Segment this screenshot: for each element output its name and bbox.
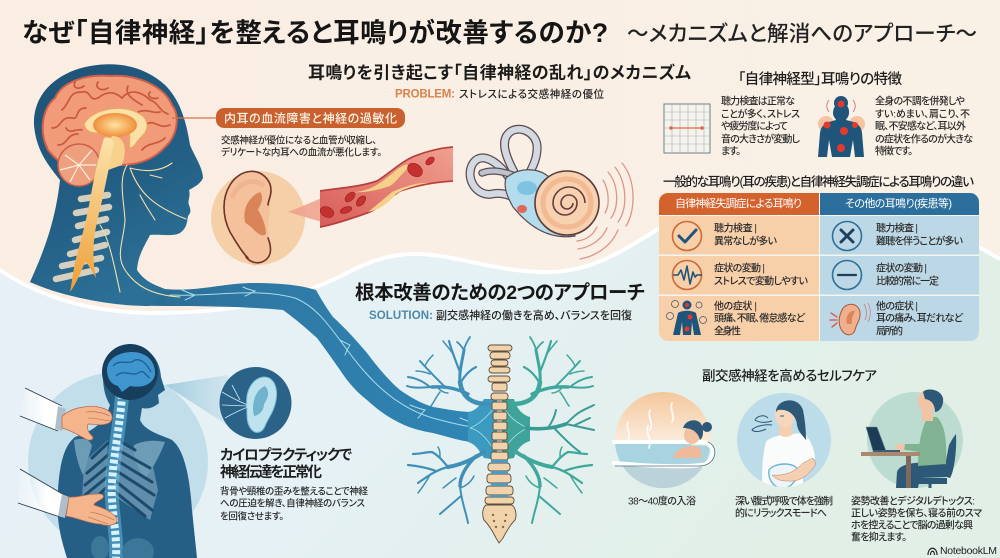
upper therapist hand [20,388,112,440]
nerve band flowing from head to spine [30,240,480,445]
icon: warm bath [600,392,715,488]
feature text: whole body: の症状を作るのが大きな [875,132,973,146]
title [22,18,977,48]
icon: body with symptoms small [666,300,706,335]
comparison heading: 一般的な耳鳴り(耳の疾患)と自律神経失調症による耳鳴りの違い [663,174,974,189]
posture caption: 奮を抑えます。 [851,530,907,544]
vertebrae of neck [56,195,109,279]
row 1 left text: 聴力検査 | [714,222,757,234]
nerve junction: blue side [468,399,497,460]
icon: check [672,222,702,250]
row 2 left text: ストレスで変動しやすい [714,274,808,288]
title: なぜ「自律神経」を整えると耳鳴りが改善するのか? [22,18,608,48]
nerves in head [100,163,186,297]
feature text: hearing [721,94,801,158]
row 3 right text: 局所的 [876,324,903,338]
callout description: デリケートな内耳への血流が悪化します。 [221,146,382,158]
table header: autonomic: 自律神経失調症による耳鳴り [675,196,802,210]
problem sub-label: ストレスによる交感神経の優位 [458,88,604,100]
head silhouette with brain and spine [30,64,203,306]
callout pill [216,108,405,128]
pointer from head to ear detail [165,375,232,428]
ribs [85,440,154,516]
feature text: hearing: や疲労度によって [721,120,788,132]
solution sub-label: 副交感神経の働きを高め、バランスを回復 [436,308,632,322]
pointer from ear to vessel [288,198,322,222]
title: 〜メカニズムと解消へのアプローチ〜 [627,22,977,46]
patient silhouette [57,347,197,558]
row 3 left text: 他の症状 | [714,300,757,312]
row 3 left text: 頭痛、不眠、倦怠感など [714,312,806,324]
chiropractic description [220,486,368,522]
lower therapist hand [18,469,117,525]
cerebellum [58,144,100,186]
icon: body with symptom points [818,96,865,157]
brainstem [107,136,125,170]
junction fibers [470,408,528,450]
callout pill: 内耳の血流障害と神経の過敏化 [224,110,397,126]
feature text: whole body: 眠、不安感など、耳以外 [875,120,966,132]
discs [490,460,508,497]
chiropractic description: を回復させます。 [220,510,284,522]
brain [43,76,177,167]
row 2 right text: 比較的常に一定 [876,274,939,288]
background: cool solution zone [0,197,1000,558]
row 2 left text [714,262,808,288]
spine illustration [483,345,516,543]
row 3 right text: 他の症状 | [876,300,918,312]
row 1 right text: 聴力検査 | [876,222,918,234]
breathing caption: 深い腹式呼吸で体を強制 [735,494,833,508]
feature text: whole body [874,94,973,158]
brain folds [52,82,170,150]
nerve junction: green side [502,399,530,460]
section heading: problem: 耳鳴りを引き起こす「自律神経の乱れ」のメカニズム [308,62,692,82]
sound waves [577,163,633,259]
rib cage backing [82,438,158,520]
icon: deep breathing [737,393,831,490]
row 1 left text [714,222,777,248]
icon: fluctuating wave [672,260,702,290]
icon: ear with pain marks [830,303,870,335]
nerve tree: blue branches [407,337,488,523]
icon: inner ear cochlea [470,129,599,237]
chiropractic heading [220,447,352,481]
posture caption: 姿勢改善とデジタルデトックス: [851,494,975,508]
nerve tree: middle green branch [526,405,594,452]
glowing spine [112,395,122,558]
row 2 left text: 症状の変動 | [714,262,765,274]
shoulder blades [74,439,92,475]
row 1 left text: 異常なしが多い [714,234,777,248]
chiropractic description: への圧迫を解き、自律神経のバランス [220,498,365,510]
row 3 left text: 全身性 [714,324,741,338]
table header: other: その他の耳鳴り(疾患等) [845,196,952,210]
solution sub-label: SOLUTION: [369,310,433,322]
icon: constricted blood vessel [319,146,453,228]
posture caption [851,494,982,544]
callout description: 交感神経が優位になると血管が収縮し、 [221,134,377,146]
chiropractic description: 背骨や頸椎の歪みを整えることで神経 [220,486,368,498]
chiropractic heading: 神経伝達を正常化 [220,464,322,481]
vestibule and tail [505,170,575,237]
background: white wave edge [0,197,1000,313]
breathing caption [735,494,833,520]
row 1 right text: 難聴を伴うことが多い [876,234,963,248]
spinal cord [70,137,114,292]
row 3 left text [714,300,806,338]
band nerve fibers [170,287,490,428]
row 3 right text [876,300,964,338]
row 1 right text [876,222,963,248]
feature text: hearing: 音の大きさが変動し [721,132,801,146]
problem sub-label [395,88,604,100]
self care heading: 副交感神経を高めるセルフケア [702,368,877,384]
posture caption: ホを控えることで脳の過剰な興 [851,518,973,532]
nerve tree: green branches [512,337,593,523]
icon: cross [832,222,862,250]
row 3 right text: 耳の痛み、耳だれなど [876,312,964,324]
icon: audiogram chart [664,104,710,153]
sacrum [483,505,516,543]
section heading: solution: 根本改善のための2つのアプローチ [355,282,645,304]
inner brain core [84,108,147,148]
bath caption: 38〜40度の入浴 [628,494,696,508]
pale circle backdrop [28,374,208,530]
breathing caption: 的にリラックスモードへ [735,506,827,520]
icon: ear in circle [211,171,305,266]
solution sub-label [369,308,632,322]
comparison table [659,193,979,341]
cochlea spiral [535,171,599,235]
icon: ear nerve detail circle [220,367,292,439]
icon: posture at desk [861,390,963,488]
problem sub-label: PROBLEM: [395,88,455,100]
row 2 right text [876,262,939,288]
vertebrae [485,345,514,504]
feature text: whole body: 全身の不調を併発しや [875,94,965,108]
lower body shapes [91,536,109,558]
row 2 right text: 症状の変動 | [876,262,927,274]
callout description [221,134,382,158]
feature text: whole body: すい:めまい、肩こり、不 [874,108,970,120]
glowing brain [102,344,158,400]
callout connector [172,117,218,119]
feature text: hearing: 聴力検査は正常な [721,94,795,108]
chiropractic heading: カイロプラクティックで [220,447,352,464]
table cell backgrounds [659,193,979,341]
NotebookLM logo: NotebookLM [940,545,997,557]
feature text: hearing: ます。 [721,146,741,158]
icon: minus [832,260,862,290]
feature heading: 「自律神経型」耳鳴りの特徴 [738,70,902,88]
semicircular canals [470,129,537,200]
posture caption: 正しい姿勢を保ち、寝る前のスマ [851,506,982,520]
feature text: hearing: ことが多く、ストレス [721,108,800,120]
chiropractic patient illustration [18,344,208,558]
head outline [30,64,203,306]
feature text: whole body: 特徴です。 [875,144,913,158]
